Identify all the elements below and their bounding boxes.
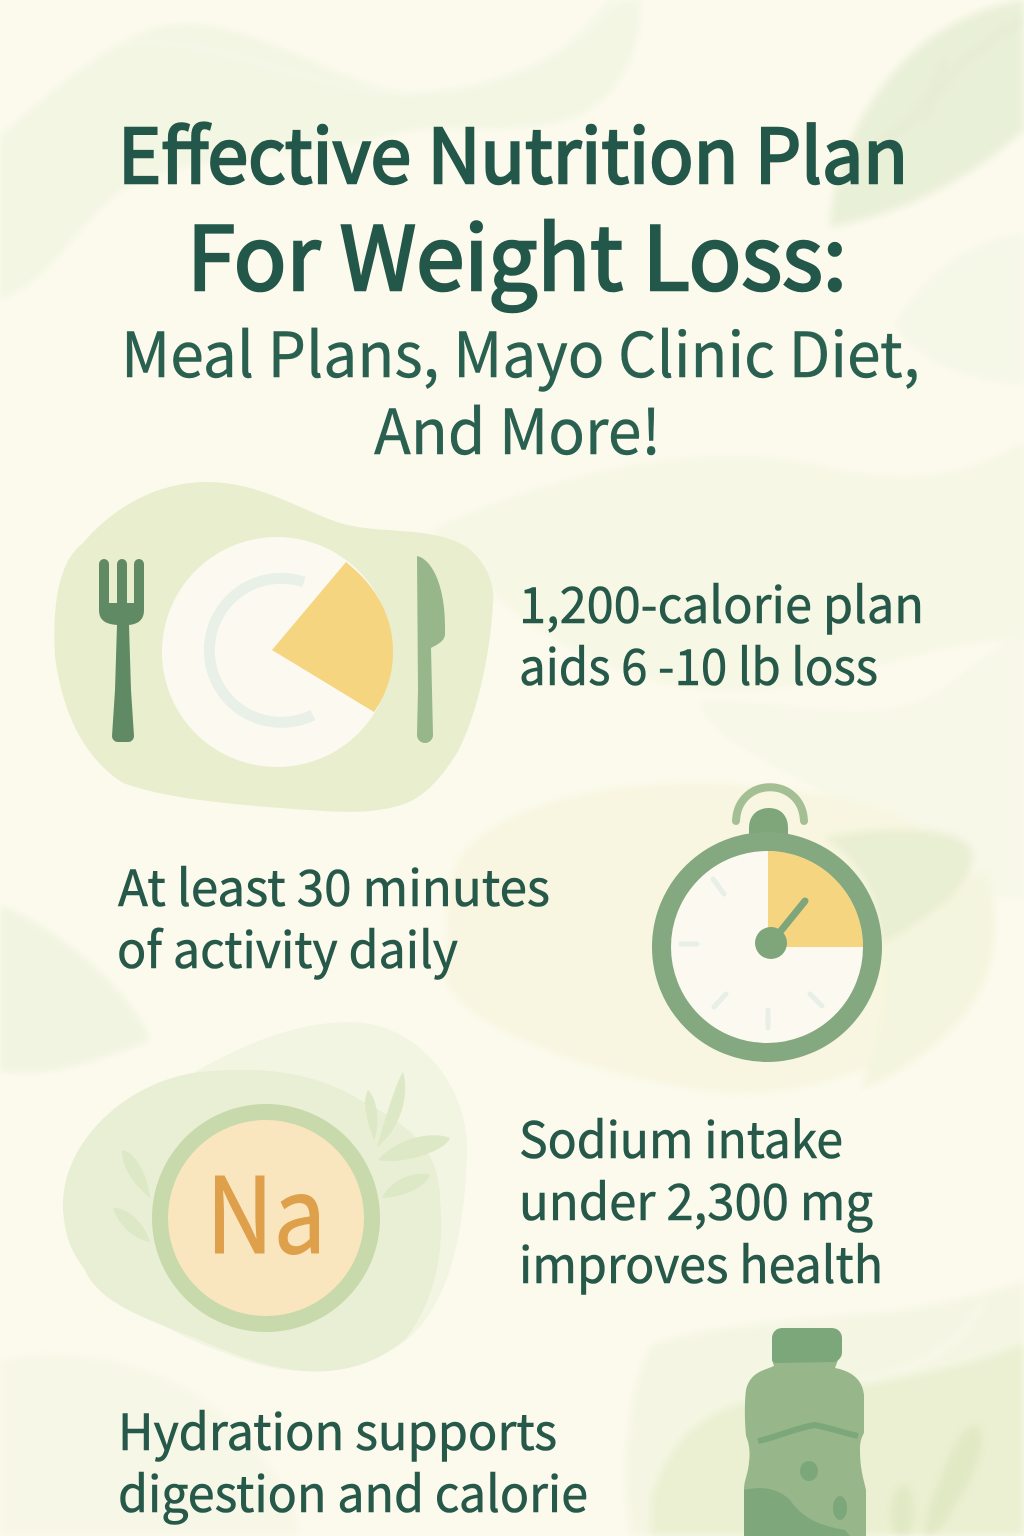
bottle spot 2 — [833, 1496, 847, 1520]
icon: stopwatch — [662, 787, 872, 1052]
text: calorie plan — [519, 566, 924, 700]
hand — [771, 901, 805, 943]
icon: water bottle — [744, 1328, 866, 1536]
leaves — [113, 1072, 450, 1242]
text: calorie plan: aids 6 -10 lb loss — [519, 628, 878, 700]
bottle spot 1 — [800, 1461, 818, 1481]
icon: plate and cutlery — [54, 482, 493, 812]
knife — [417, 556, 445, 743]
fork — [99, 559, 144, 742]
text: calorie plan: 1,200-calorie plan — [519, 566, 924, 638]
text: activity: At least 30 minutes — [118, 849, 550, 921]
quarter segment — [768, 851, 863, 947]
subtitle line 2: And More! — [374, 382, 661, 472]
sodium ring — [160, 1112, 372, 1324]
hub — [755, 927, 787, 959]
subtitle line 1: Meal Plans, Mayo Clinic Diet, — [121, 305, 920, 395]
text: sodium: under 2,300 mg — [519, 1163, 873, 1235]
stopwatch crown — [749, 808, 788, 836]
bottle lower water — [744, 1488, 850, 1536]
bottle body — [744, 1360, 866, 1536]
title line 2: For Weight Loss: — [187, 189, 847, 316]
icon: sodium — [63, 1022, 467, 1371]
text: hydration — [118, 1393, 588, 1527]
sodium outer blob — [70, 1022, 467, 1371]
stopwatch arc — [736, 787, 804, 821]
text: hydration: Hydration supports — [118, 1393, 557, 1465]
plate — [162, 537, 392, 767]
text: activity — [117, 849, 550, 983]
food wedge — [272, 562, 393, 712]
stopwatch body — [662, 842, 872, 1052]
tick marks — [681, 879, 822, 1028]
text: sodium: Sodium intake — [519, 1101, 843, 1173]
title line 1: Effective Nutrition Plan — [118, 96, 908, 205]
bottle water line — [758, 1425, 858, 1441]
text: sodium — [519, 1101, 883, 1298]
plate arc — [209, 578, 313, 722]
bottle cap — [772, 1328, 842, 1363]
plate blob — [54, 482, 493, 812]
text: activity: of activity daily — [117, 911, 458, 983]
title — [118, 96, 920, 472]
text: hydration: digestion and calorie — [118, 1455, 588, 1527]
text: sodium: improves health — [519, 1226, 883, 1298]
sodium inner blob — [63, 1070, 441, 1371]
sodium symbol: Na — [206, 1132, 326, 1284]
